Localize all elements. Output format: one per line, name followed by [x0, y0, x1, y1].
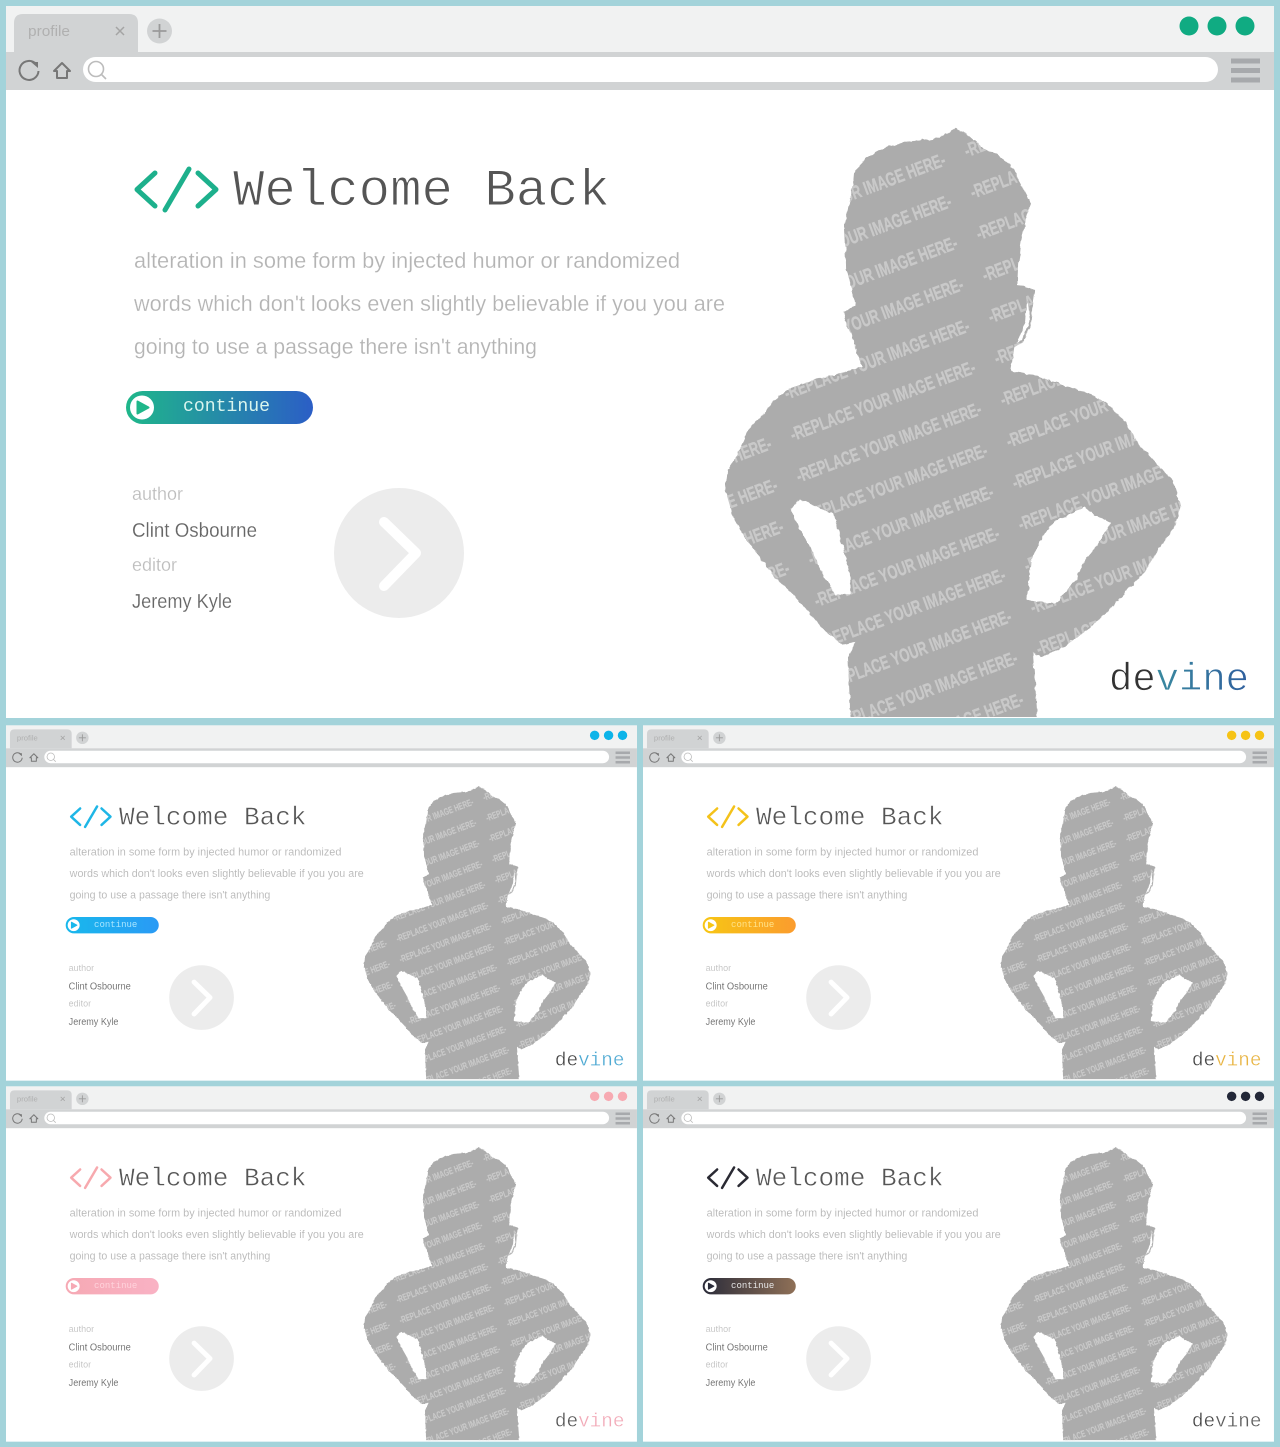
browser chrome — [643, 1086, 1274, 1128]
figure placeholder silhouette — [912, 1099, 1253, 1447]
tab label: profile — [654, 1094, 675, 1103]
tab label: profile — [654, 733, 675, 742]
figure placeholder silhouette: -REPLACE YOUR IMAGE HERE- -REPLACE YOUR IMAGE HERE- -REPLACE YOUR IMAGE HERE- — [583, 281, 1183, 522]
logo: devine: devine — [1192, 1411, 1262, 1433]
icon: next arrow circle — [169, 1326, 234, 1391]
icon: next arrow circle — [806, 1326, 871, 1391]
credits: editor — [69, 999, 91, 1009]
continue button: continue — [183, 397, 270, 417]
body text: going to use a passage there isn't anything — [70, 890, 270, 902]
figure placeholder silhouette — [275, 1099, 616, 1447]
credits: author — [706, 1324, 731, 1334]
tab label: profile — [17, 733, 38, 742]
credits: author — [132, 484, 183, 504]
body text: going to use a passage there isn't anything — [707, 1251, 907, 1263]
credits: editor — [706, 999, 728, 1009]
icon: next arrow circle — [806, 965, 871, 1030]
continue button — [66, 1278, 159, 1294]
window control dots — [590, 731, 627, 740]
credits: editor — [706, 1360, 728, 1370]
tab label: profile — [28, 23, 70, 40]
figure placeholder silhouette: -REPLACE YOUR IMAGE HERE- -REPLACE YOUR IMAGE HERE- -REPLACE YOUR IMAGE HERE- — [619, 530, 1219, 771]
figure placeholder silhouette — [912, 738, 1253, 1147]
credits — [69, 1324, 131, 1389]
window control dots — [1180, 16, 1254, 36]
panel: pink browser window — [6, 1086, 637, 1447]
heading: Welcome Back — [756, 802, 944, 832]
body text: going to use a passage there isn't anything — [134, 334, 537, 359]
browser chrome — [6, 725, 637, 767]
credits: Jeremy Kyle — [132, 591, 232, 613]
logo: devine: devine — [1192, 1050, 1262, 1072]
credits: Clint Osbourne — [69, 982, 131, 993]
browser chrome — [6, 1086, 637, 1128]
continue button — [703, 1278, 796, 1294]
figure placeholder silhouette: -REPLACE YOUR IMAGE HERE- -REPLACE YOUR IMAGE HERE- -REPLACE YOUR IMAGE HERE- — [559, 115, 1159, 356]
body text: going to use a passage there isn't anything — [707, 890, 907, 902]
credits: Clint Osbourne — [132, 520, 257, 542]
body text — [706, 1208, 1001, 1263]
figure placeholder silhouette: -REPLACE YOUR IMAGE HERE- -REPLACE YOUR IMAGE HERE- -REPLACE YOUR IMAGE HERE- — [631, 613, 1231, 854]
body text: alteration in some form by injected humor or randomized — [70, 1208, 341, 1220]
continue button: continue — [731, 920, 774, 930]
continue button — [703, 917, 796, 933]
icon: code brackets — [71, 1167, 110, 1188]
figure placeholder silhouette — [547, 32, 1231, 854]
credits: Clint Osbourne — [706, 1343, 768, 1354]
icon: code brackets — [708, 806, 747, 827]
credits — [706, 1324, 768, 1389]
body text: alteration in some form by injected humor or randomized — [707, 1208, 978, 1220]
window background — [643, 1086, 1274, 1442]
body text — [706, 847, 1001, 902]
body text: alteration in some form by injected humor or randomized — [707, 847, 978, 859]
browser chrome — [6, 6, 1274, 90]
window background — [643, 725, 1274, 1081]
figure placeholder silhouette: -REPLACE YOUR IMAGE HERE- -REPLACE YOUR IMAGE HERE- -REPLACE YOUR IMAGE HERE- — [577, 239, 1177, 480]
figure placeholder silhouette: -REPLACE YOUR IMAGE HERE- -REPLACE YOUR IMAGE HERE- -REPLACE YOUR IMAGE HERE- — [607, 447, 1207, 688]
heading: Welcome Back — [233, 162, 610, 221]
credits: Jeremy Kyle — [706, 1378, 756, 1389]
window background — [6, 725, 637, 1081]
credits: Jeremy Kyle — [69, 1017, 119, 1028]
credits — [69, 963, 131, 1028]
continue button: continue — [94, 1281, 137, 1291]
window control dots — [1227, 731, 1264, 740]
heading: Welcome Back — [119, 802, 307, 832]
figure placeholder silhouette: -REPLACE YOUR IMAGE HERE- -REPLACE YOUR IMAGE HERE- -REPLACE YOUR IMAGE HERE- — [625, 571, 1225, 812]
panel: large green browser window — [6, 6, 1274, 718]
body text — [69, 1208, 364, 1263]
tab label: profile — [17, 1094, 38, 1103]
figure placeholder silhouette: -REPLACE YOUR IMAGE HERE- -REPLACE YOUR IMAGE HERE- -REPLACE YOUR IMAGE HERE- — [601, 405, 1201, 646]
body text: words which don't looks even slightly believable if you you are — [133, 291, 725, 316]
window background — [6, 6, 1274, 718]
credits: author — [706, 963, 731, 973]
browser chrome — [643, 725, 1274, 767]
body text: words which don't looks even slightly believable if you you are — [706, 1229, 1001, 1241]
panel: blue browser window — [6, 725, 637, 1147]
credits: Clint Osbourne — [706, 982, 768, 993]
credits — [132, 484, 257, 613]
credits: Clint Osbourne — [69, 1343, 131, 1354]
heading: Welcome Back — [119, 1163, 307, 1193]
figure placeholder silhouette: -REPLACE YOUR IMAGE HERE- -REPLACE YOUR IMAGE HERE- -REPLACE YOUR IMAGE HERE- — [565, 156, 1165, 397]
panel: yellow browser window — [643, 725, 1274, 1147]
figure placeholder silhouette: -REPLACE YOUR IMAGE HERE- -REPLACE YOUR IMAGE HERE- -REPLACE YOUR IMAGE HERE- — [547, 32, 1147, 273]
credits: Jeremy Kyle — [69, 1378, 119, 1389]
icon: code brackets — [71, 806, 110, 827]
credits: author — [69, 1324, 94, 1334]
panel: dark browser window — [643, 1086, 1274, 1447]
figure placeholder silhouette: -REPLACE YOUR IMAGE HERE- -REPLACE YOUR IMAGE HERE- -REPLACE YOUR IMAGE HERE- — [553, 73, 1153, 314]
credits: author — [69, 963, 94, 973]
figure placeholder silhouette: -REPLACE YOUR IMAGE HERE- -REPLACE YOUR IMAGE HERE- -REPLACE YOUR IMAGE HERE- — [589, 322, 1189, 563]
body text: words which don't looks even slightly believable if you you are — [706, 868, 1001, 880]
figure placeholder silhouette: -REPLACE YOUR IMAGE HERE- -REPLACE YOUR IMAGE HERE- -REPLACE YOUR IMAGE HERE- — [571, 198, 1171, 439]
body text: words which don't looks even slightly believable if you you are — [69, 1229, 364, 1241]
credits: editor — [132, 555, 177, 575]
window control dots — [1227, 1092, 1264, 1101]
credits: editor — [69, 1360, 91, 1370]
continue button — [66, 917, 159, 933]
body text — [133, 248, 725, 359]
body text: alteration in some form by injected humor or randomized — [134, 248, 680, 273]
figure placeholder silhouette: -REPLACE YOUR IMAGE HERE- -REPLACE YOUR IMAGE HERE- -REPLACE YOUR IMAGE HERE- — [613, 488, 1213, 729]
icon: next arrow circle — [334, 488, 464, 618]
logo: devine: devine — [1109, 658, 1249, 702]
continue button: continue — [94, 920, 137, 930]
body text: alteration in some form by injected humor or randomized — [70, 847, 341, 859]
body text — [69, 847, 364, 902]
window background — [6, 1086, 637, 1442]
credits: Jeremy Kyle — [706, 1017, 756, 1028]
icon: code brackets — [708, 1167, 747, 1188]
continue button: continue — [731, 1281, 774, 1291]
icon: next arrow circle — [169, 965, 234, 1030]
figure placeholder silhouette — [275, 738, 616, 1147]
credits — [706, 963, 768, 1028]
logo: devine: devine — [555, 1411, 625, 1433]
continue button — [126, 391, 313, 424]
body text: words which don't looks even slightly believable if you you are — [69, 868, 364, 880]
icon: code brackets — [137, 169, 216, 210]
window control dots — [590, 1092, 627, 1101]
heading: Welcome Back — [756, 1163, 944, 1193]
figure placeholder silhouette: -REPLACE YOUR IMAGE HERE- -REPLACE YOUR IMAGE HERE- -REPLACE YOUR IMAGE HERE- — [595, 364, 1195, 605]
logo: devine: devine — [555, 1050, 625, 1072]
body text: going to use a passage there isn't anything — [70, 1251, 270, 1263]
